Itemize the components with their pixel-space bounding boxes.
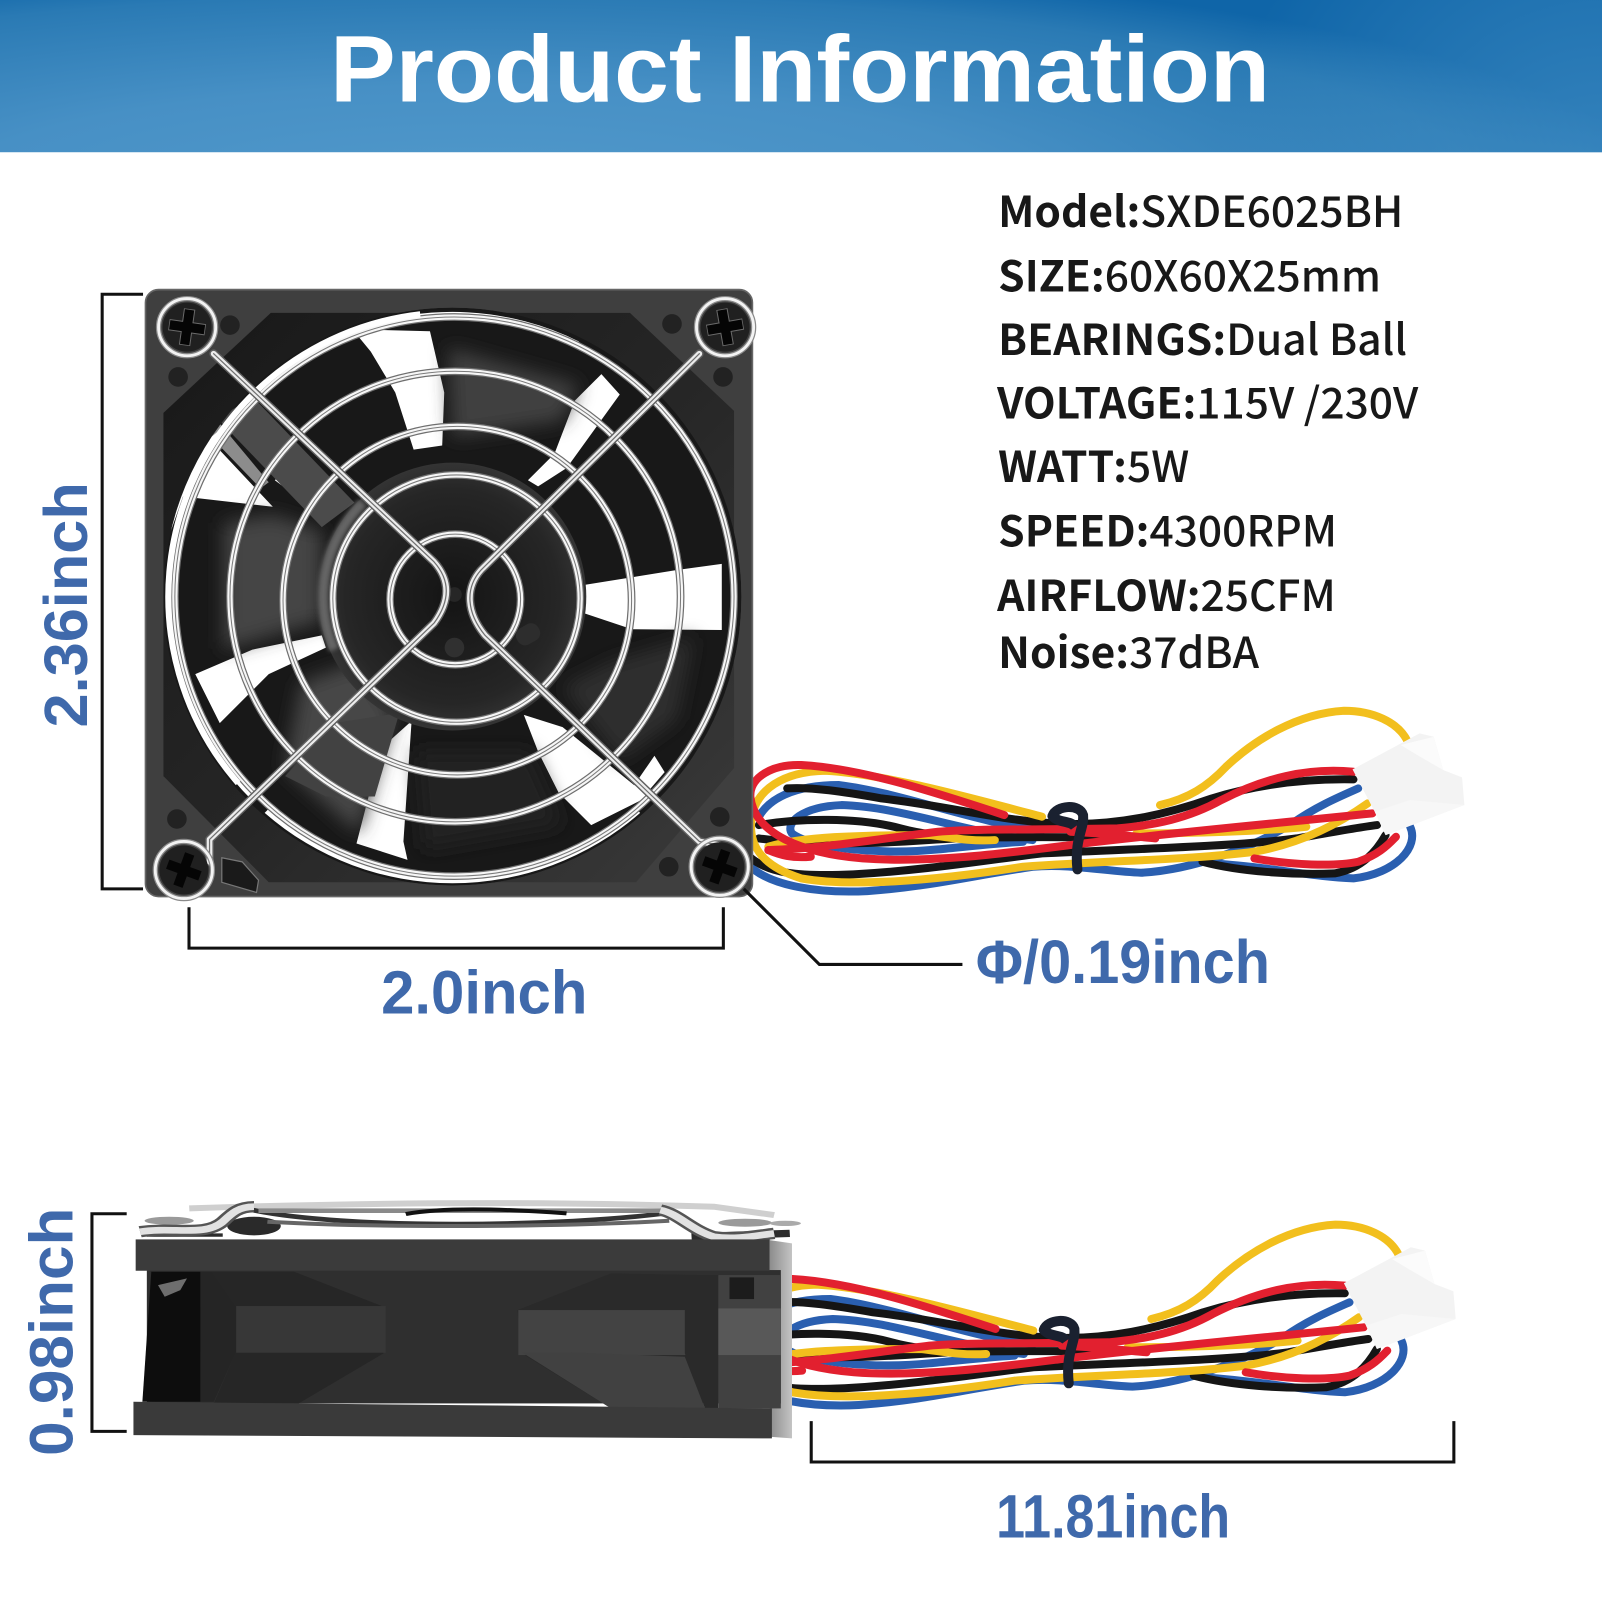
dimension label: 0.98inch: 0.98inch	[18, 1208, 86, 1456]
dimension label: 11.81inch: 11.81inch	[996, 1483, 1230, 1551]
spec list: WATT:5W	[998, 434, 1189, 495]
fan frame	[145, 290, 752, 897]
wire harness: front view	[747, 711, 1464, 892]
spec list: Noise:37dBA	[998, 620, 1260, 681]
screw: top left	[159, 299, 216, 356]
header banner	[0, 0, 1602, 152]
fan struts	[218, 397, 354, 527]
blade shading	[224, 348, 693, 850]
title: Product Information	[330, 17, 1270, 123]
fan: front view	[144, 288, 756, 902]
wire harness: side view	[738, 1225, 1456, 1405]
dimension: width bracket	[189, 907, 723, 948]
spec list: BEARINGS:Dual Ball	[998, 307, 1407, 368]
finger guard rings	[52, 196, 853, 997]
fan: side view	[133, 1203, 801, 1438]
inner body	[147, 1270, 781, 1403]
right side face	[770, 1240, 792, 1438]
dimension label: 2.0inch: 2.0inch	[381, 959, 587, 1027]
spec list: VOLTAGE:115V /230V	[996, 370, 1419, 431]
dimension: cable length bracket	[811, 1421, 1454, 1462]
spec list: SPEED:4300RPM	[998, 499, 1337, 560]
side guard wire	[140, 1203, 801, 1238]
fan hub	[319, 463, 586, 730]
frame mounting holes	[167, 314, 733, 877]
finger guard cross wires	[210, 354, 718, 862]
dimension label: hole diameter: Φ/0.19inch	[976, 928, 1270, 996]
screw: bottom left	[155, 841, 212, 899]
bottom plate	[133, 1402, 772, 1438]
side screws	[158, 1278, 187, 1297]
dimension: height bracket	[102, 294, 143, 889]
left opening	[142, 1272, 200, 1402]
screw: top right	[696, 299, 754, 356]
leader line: hole diameter	[744, 889, 962, 964]
spec list: Model:SXDE6025BH	[998, 179, 1403, 240]
screw: bottom right	[691, 838, 748, 895]
right outer section	[718, 1275, 781, 1408]
spec list: AIRFLOW:25CFM	[996, 563, 1336, 624]
spec list: SIZE:60X60X25mm	[998, 244, 1381, 305]
fan bore	[163, 308, 741, 886]
blade air gaps	[167, 312, 722, 883]
right inner channel	[517, 1273, 705, 1408]
spec list	[996, 179, 1419, 681]
fan shroud	[163, 313, 734, 882]
cable exit notch	[222, 858, 259, 892]
left inner channel	[212, 1272, 383, 1403]
top plate	[136, 1239, 770, 1271]
dimension: depth bracket	[92, 1214, 127, 1431]
dimension label: 2.36inch: 2.36inch	[32, 482, 100, 727]
